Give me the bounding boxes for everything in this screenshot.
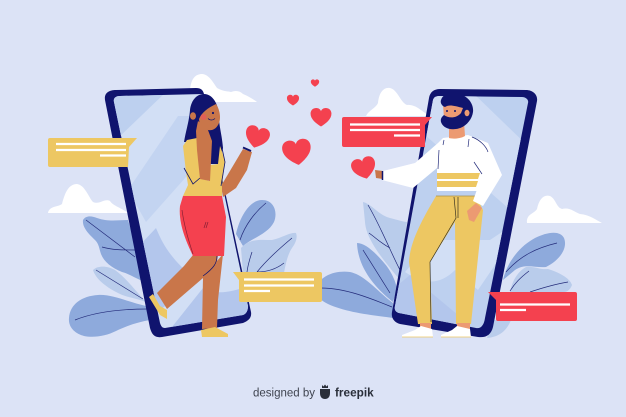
credit: designed by freepik: freepik xyxy=(335,386,374,400)
hand on hip xyxy=(467,203,482,222)
heart in hand xyxy=(242,124,271,151)
credit: designed by freepik xyxy=(253,384,374,400)
raised hand to face xyxy=(196,121,212,181)
leaves: left group xyxy=(69,216,150,337)
cloud: top left xyxy=(190,74,257,102)
leaves: right group xyxy=(487,233,572,338)
hair and beard xyxy=(441,93,473,129)
sweater xyxy=(382,135,502,206)
pants xyxy=(409,196,483,324)
front leg xyxy=(202,254,223,329)
arm xyxy=(221,149,252,197)
woman xyxy=(149,94,271,337)
leaves: centre group behind woman xyxy=(236,200,297,273)
heart in hand xyxy=(350,155,379,182)
ankles xyxy=(420,323,470,331)
speech bubble: red top xyxy=(342,117,432,147)
phone: right xyxy=(390,89,537,337)
top xyxy=(183,138,225,196)
shoes xyxy=(402,326,433,337)
leaves: right of centre group xyxy=(316,202,407,318)
icon: freepik bear xyxy=(320,384,330,399)
man xyxy=(350,93,502,337)
hair xyxy=(184,94,223,164)
extended hand xyxy=(375,170,383,179)
speech bubble: yellow bottom xyxy=(233,272,322,302)
hearts: floating xyxy=(281,79,331,167)
neck xyxy=(449,122,465,139)
face xyxy=(443,103,466,125)
cloud: top right xyxy=(366,88,430,116)
illustration: two people connecting through phones xyxy=(48,74,602,399)
skirt xyxy=(180,196,226,256)
speech bubble: red bottom right xyxy=(488,292,577,321)
shoes xyxy=(149,294,167,319)
cloud: far right xyxy=(527,196,602,223)
speech bubble: yellow left xyxy=(48,138,137,167)
face xyxy=(199,104,220,130)
phone: left xyxy=(100,85,260,337)
cloud: left xyxy=(48,184,128,213)
back leg xyxy=(157,255,218,309)
credit: designed by freepik: designed by xyxy=(253,388,315,400)
